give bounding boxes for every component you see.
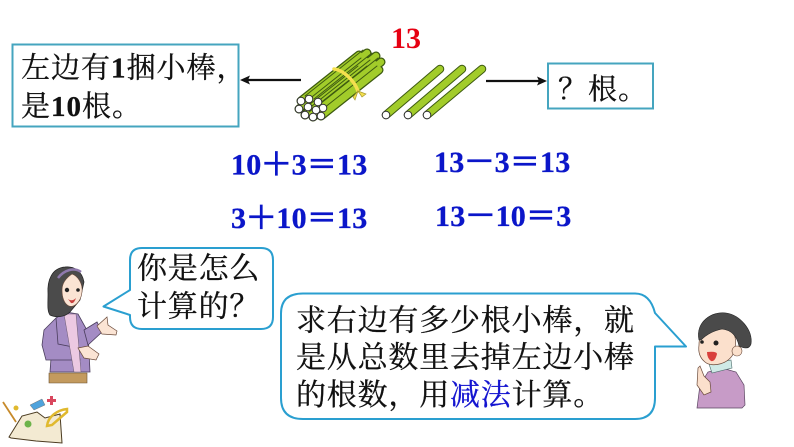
- label box: left bundle: 左边有1捆小棒，: [21, 52, 247, 84]
- total number 13: 13: [391, 22, 421, 55]
- label box: right sticks: ？根。: [558, 73, 648, 106]
- speech bubble: student: 是从总数里去掉左边小棒: [296, 342, 635, 374]
- icon: teacher: [42, 267, 117, 383]
- icon: boy: [697, 313, 751, 408]
- label box: left bundle: [12, 44, 247, 126]
- icon: three single sticks: [382, 69, 482, 119]
- equation: 3+10=13: 3＋10＝13: [231, 202, 367, 235]
- label box: left bundle: 是10根。: [21, 90, 142, 123]
- speech bubble: student: 求右边有多少根小棒，就: [296, 304, 635, 338]
- arrow: to right label: [486, 76, 547, 86]
- equation: 13-3=13: 13－3＝13: [434, 146, 570, 179]
- speech bubble: teacher: 你是怎么: [137, 252, 260, 286]
- speech bubble: student: [281, 294, 686, 419]
- arrow: to left label: [240, 76, 301, 84]
- speech bubble: student: 的根数，用减法计算。: [296, 379, 604, 412]
- icon: book and stationery: [3, 396, 67, 443]
- speech bubble: teacher: [104, 248, 273, 329]
- speech bubble: teacher: 计算的？: [137, 290, 260, 324]
- equation: 13-10=3: 13－10＝3: [435, 200, 571, 233]
- equation: 10+3=13: 10＋3＝13: [231, 148, 367, 182]
- icon: bundle of ten sticks: [295, 50, 381, 121]
- label box: right sticks: [548, 64, 653, 108]
